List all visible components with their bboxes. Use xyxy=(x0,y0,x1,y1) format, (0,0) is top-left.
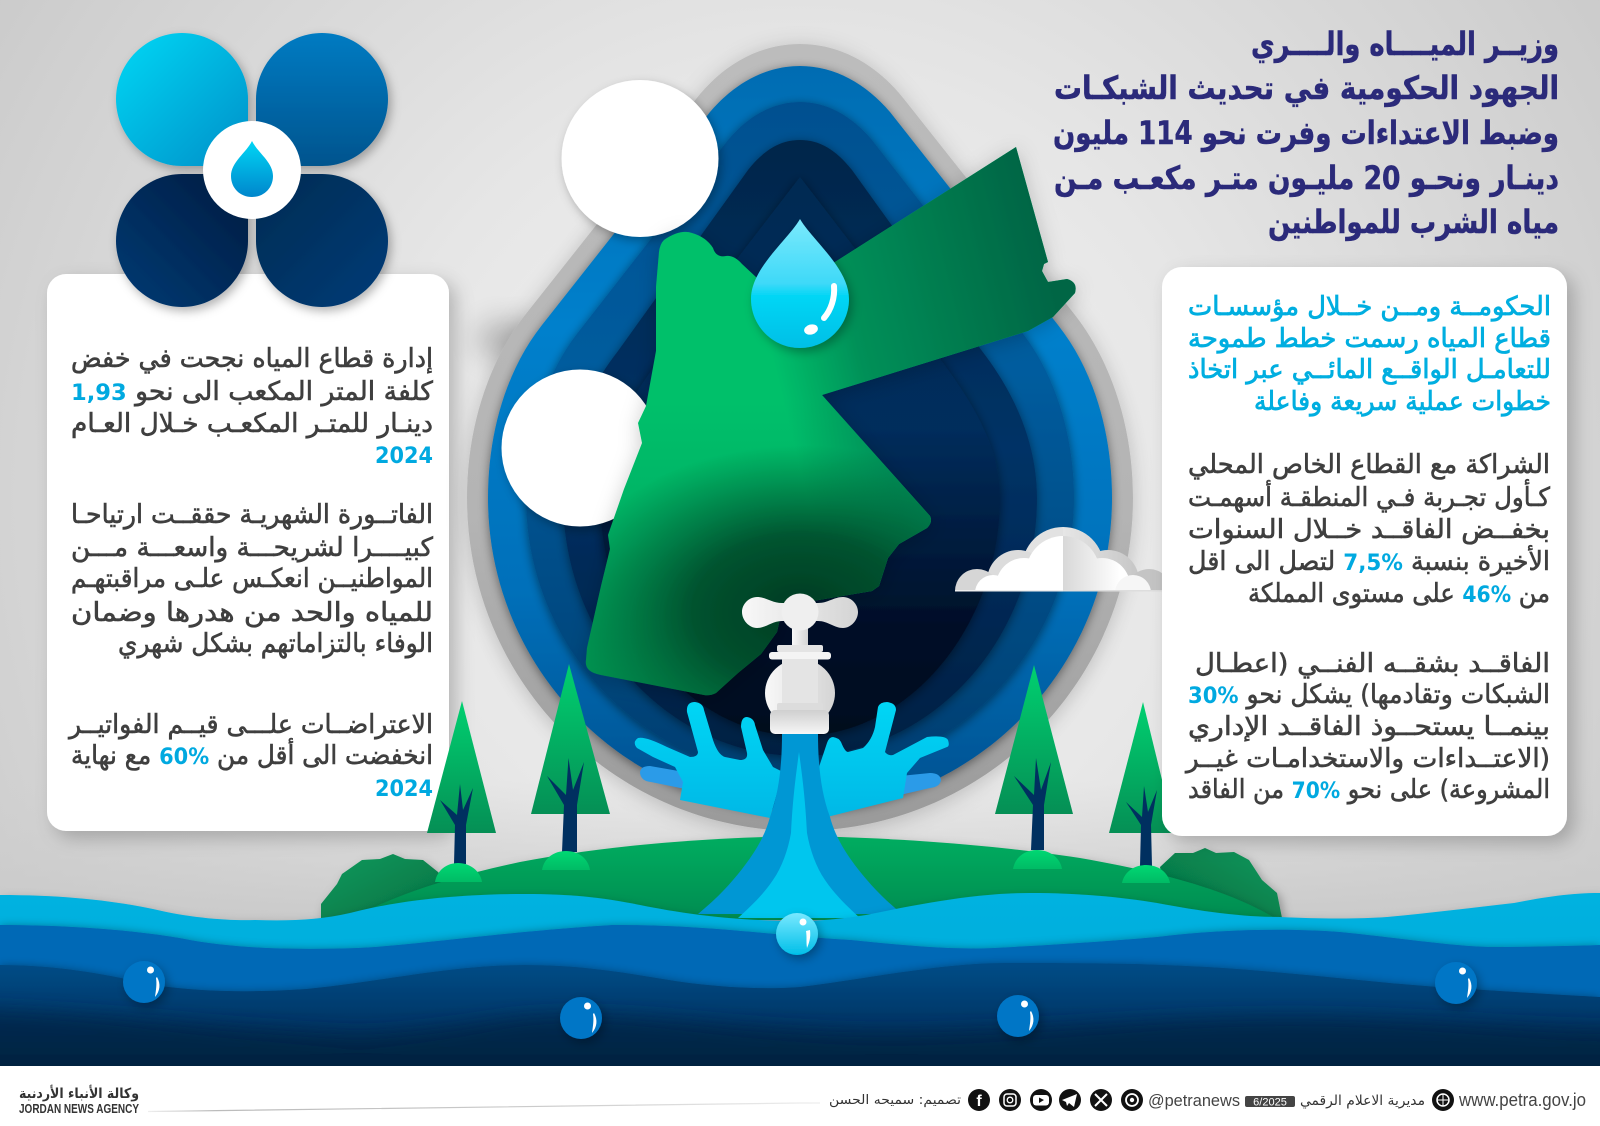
icon: globe xyxy=(1432,1089,1454,1111)
icon: youtube xyxy=(1030,1089,1052,1111)
water drop layers xyxy=(467,44,1133,831)
icon: facebook xyxy=(968,1089,990,1111)
website url: www.petra.gov.jo xyxy=(1458,1090,1586,1110)
white circle middle xyxy=(502,370,658,526)
date badge: 6/2025 xyxy=(1253,1096,1287,1108)
water droplet: cyan xyxy=(776,913,818,955)
text block: right panel paragraph 2: كـأول تجـربة فـي المنطقـة أسهمـت xyxy=(1188,478,1551,513)
panel: right text card xyxy=(1162,267,1567,836)
map of Jordan xyxy=(586,147,1076,695)
water droplet 4 xyxy=(1435,962,1477,1004)
text block: left panel paragraph 2: كبيــــرا لشريحـــة واسعـــة مـــن xyxy=(71,533,434,563)
icon: telegram xyxy=(1059,1089,1081,1111)
tree left large xyxy=(531,664,610,870)
text block: right panel intro xyxy=(1188,292,1551,417)
icon: whatsapp xyxy=(1121,1089,1143,1111)
footer band xyxy=(0,1066,1600,1126)
handle text: @petranews xyxy=(1148,1091,1240,1110)
tree right large xyxy=(995,665,1073,869)
text block: right panel paragraph 3: المشروعة) على نحو %70 من الفاقد xyxy=(1188,775,1550,805)
text block: right panel paragraph 2: الأخيرة بنسبة %7,5 لتصل الى اقل xyxy=(1188,544,1550,577)
text block: left panel paragraph 3: 2024 xyxy=(375,777,433,802)
trees xyxy=(427,664,1175,883)
text block: right panel intro: الحكومــة ومــن خــلال مؤسسـات xyxy=(1188,292,1551,322)
text block: right panel paragraph 3: الشبكات وتقادمها) يشكل نحو %30 xyxy=(1188,680,1550,710)
text block: right panel paragraph 2: من %46 على مستوى المملكة xyxy=(1248,579,1550,609)
text block: left panel paragraph 1: 2024 xyxy=(375,444,433,469)
text block: left panel paragraph 2: الفاتــورة الشهريـة حققــت ارتياحـا xyxy=(71,500,433,530)
text block: left panel paragraph 2: الوفاء بالتزاماتهم بشكل شهري xyxy=(118,629,433,659)
text block: right panel intro: خطوات عملية سريعة وفاعلة xyxy=(1254,387,1551,417)
text block: left panel paragraph 2 xyxy=(71,500,434,659)
title xyxy=(1053,25,1559,241)
text block: left panel paragraph 1: كلفة المتر المكعب الى نحو 1,93 xyxy=(71,377,434,407)
agency logo text: وكالة الأنباء الأردنية xyxy=(19,1085,139,1102)
icon: instagram xyxy=(999,1089,1021,1111)
text block: left panel paragraph 3 xyxy=(67,710,433,802)
agency logo text xyxy=(19,1085,139,1116)
water droplet 2 xyxy=(560,997,602,1039)
faucet xyxy=(742,594,858,734)
text block: left panel paragraph 2: المواطنيــن انعكـس علـى مراقبتهـم xyxy=(71,564,433,594)
text block: right panel intro: قطاع المياه رسمت خطط طموحة xyxy=(1188,324,1551,354)
small blue splash accents xyxy=(640,766,941,795)
text block: right panel paragraph 3: الفاقــد بشقــه الفنــي (اعطـال xyxy=(1195,649,1550,679)
text block: right panel paragraph 2: بخفــض الفاقــد خــلال السنوات xyxy=(1188,515,1550,545)
white circle top xyxy=(562,80,718,237)
tree left small xyxy=(427,701,496,882)
text block: left panel paragraph 1 xyxy=(71,344,434,469)
water waves xyxy=(0,893,1600,1090)
footer rule xyxy=(148,1103,820,1112)
water droplet 3 xyxy=(997,995,1039,1037)
water stream xyxy=(698,733,902,918)
date badge xyxy=(1245,1096,1295,1108)
wave 1 xyxy=(0,893,1600,1066)
text block: right panel paragraph 3: (الاعتــداءات والاستخدامـات غيــر xyxy=(1184,744,1550,774)
text block: right panel paragraph 3 xyxy=(1184,649,1550,805)
wave 3 xyxy=(0,963,1600,1066)
soft shadow smear beside drop xyxy=(476,320,544,360)
text block: right panel intro: للتعامـل الواقــع المائــي عبر اتخاذ xyxy=(1188,355,1551,385)
text block: right panel paragraph 3: بينمــا يستحــوذ الفاقــد الإداري xyxy=(1188,712,1550,742)
text block: left panel paragraph 3: الاعتراضــات علـــى قيــم الفواتيــر xyxy=(67,710,433,740)
icon: facebook: f xyxy=(976,1093,982,1110)
text block: left panel paragraph 1: إدارة قطاع المياه نجحت في خفض xyxy=(71,344,433,374)
social icons xyxy=(968,1089,1143,1111)
logo: four petals and water drop xyxy=(116,33,388,307)
text block: right panel paragraph 2 xyxy=(1188,450,1551,609)
water droplet 1 xyxy=(123,961,165,1003)
text block: right panel paragraph 2: الشراكة مع القطاع الخاص المحلي xyxy=(1188,450,1550,480)
icon: large water drop on map xyxy=(751,219,849,348)
wave 4 xyxy=(0,1009,1600,1090)
department text: مديرية الاعلام الرقمي xyxy=(1300,1093,1425,1109)
text block: left panel paragraph 2: للمياه والحد من هدرها وضمان xyxy=(71,598,433,628)
wave 2 xyxy=(0,925,1600,1066)
panel: left text card xyxy=(47,274,449,831)
text block: left panel paragraph 3: انخفضت الى أقل من %60 مع نهاية xyxy=(71,737,433,771)
hill xyxy=(347,836,1278,920)
title: دينـار ونحـو 20 مليـون متـر مكعـب مـن xyxy=(1054,159,1559,197)
designer credit: تصميم: سميحه الحسن xyxy=(829,1093,961,1108)
bushes xyxy=(321,848,1282,925)
text block: left panel paragraph 1: دينـار للمتـر المكعـب خـلال العـام xyxy=(71,409,433,439)
icon: X xyxy=(1090,1089,1112,1111)
icon: cloud xyxy=(955,527,1162,592)
water splash xyxy=(635,702,949,818)
tree right small xyxy=(1109,702,1175,883)
agency logo text: JORDAN NEWS AGENCY xyxy=(19,1101,139,1116)
